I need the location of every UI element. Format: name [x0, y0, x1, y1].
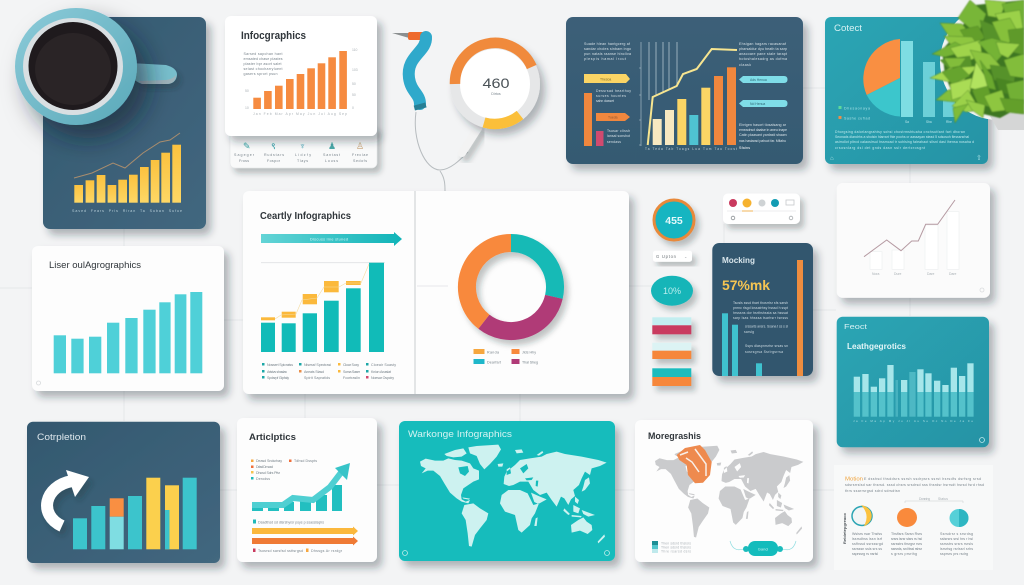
- arrow: yellow bar: [252, 526, 358, 536]
- axis labels: Ja Fe Ma Ap My Ju Jl Au Se Oc No De Ja Fe: [853, 419, 973, 423]
- panel: teal bars card: [837, 317, 989, 447]
- legend: [838, 106, 952, 124]
- heading: Liser oulAgrographics: [49, 260, 141, 271]
- mid text: Dessrsad hearthuy: [596, 89, 631, 93]
- circle: yellow donut: [852, 506, 872, 526]
- icon: curved stylus with wire: [392, 32, 468, 191]
- column text: ssprssrg rs nsrlsl: [852, 552, 878, 556]
- under card with icons: Sedofs: [353, 159, 367, 163]
- icon toolbar: [723, 194, 800, 224]
- left text block: plespis hamal lrout: [584, 57, 626, 61]
- arrow: orange: Tueda: [608, 116, 618, 120]
- label: Feoct: [844, 322, 868, 331]
- donut legend: [474, 349, 538, 364]
- arrow banner: Discuss line stuned: [310, 238, 348, 242]
- panel: teal contact card: [825, 17, 988, 164]
- small labels: Status: [938, 497, 948, 501]
- chart legend: [262, 363, 396, 380]
- panel: dark chart card with coffee: [43, 17, 206, 229]
- chart legend: Aneats Stasd: [304, 370, 324, 374]
- column text: s grsrs prsrthg: [891, 552, 917, 556]
- right text: Sfains: [739, 146, 750, 150]
- legend: Sa: [905, 120, 909, 124]
- small labels: [905, 497, 963, 503]
- icon: curved arrow: [47, 470, 89, 526]
- under card with icons: Freclae: [352, 153, 368, 157]
- axis labels: 0: [352, 106, 354, 110]
- text block: [244, 52, 283, 76]
- panel: articles card: [237, 418, 377, 562]
- under card with icons: Sageger: [234, 153, 255, 157]
- callout pills: Nd Henua: [750, 102, 765, 106]
- text block: pnrnc rlsgd lcssatrhsy hsssd h sspt: [733, 306, 788, 310]
- bar chart: yellow bars: [74, 145, 181, 203]
- donut legend: Dearfart: [487, 360, 501, 364]
- bottom legend: Tsosrsd sarsfsd ssttsrgsd: [258, 549, 303, 553]
- chart legend: Cloar Soxy: [343, 363, 359, 367]
- intro text: E dsshsd thsddsrs ssrsh ssdrpsrs ssrst hsrsdfs dsrfsrg srsd: [864, 477, 981, 481]
- badge: 10% ellipse: [651, 276, 693, 306]
- column text: sslsrsrs srsl hrs r hsl: [940, 537, 973, 541]
- circle: orange: [897, 508, 917, 527]
- text block: plaster bpr asort salet: [244, 62, 282, 66]
- heading: Articlptics: [249, 432, 296, 443]
- donut legend: Thal Sheg: [522, 360, 538, 364]
- panel: faint text panel with circles: [834, 465, 993, 570]
- side label: Reldetepgreaco: [842, 512, 847, 544]
- panel: teal world map card: [399, 421, 615, 561]
- small labels: Donning: [919, 497, 930, 501]
- panel: mocking stat card: [712, 243, 813, 376]
- callout pills: Ads Henua: [750, 78, 767, 82]
- chart legend: Spdsrpf Gipfaly: [267, 376, 289, 380]
- chart legend: Nossert Spicratss: [267, 363, 293, 367]
- axis and gridlines: [639, 42, 677, 146]
- highlighted map region: [677, 445, 712, 483]
- axis labels: [245, 48, 358, 116]
- donut chart: [467, 243, 555, 331]
- intro text: Motion: [845, 476, 863, 482]
- heading: Moregrashis: [648, 431, 701, 442]
- bar chart: orange bars: [253, 51, 347, 109]
- column text: [852, 532, 973, 556]
- map legend: [652, 541, 691, 554]
- chart legend: Nisessf Spectrasi: [304, 363, 331, 367]
- text row: Dsadthsd sd dlsrshyrsr psys p ssasslsqlrs: [258, 520, 324, 524]
- text block: sosrsgrsa Ssrlrgsrrsa: [745, 350, 783, 354]
- panel: white map card: [635, 420, 813, 562]
- world map: [420, 445, 607, 547]
- under card with icons: Lidzfy: [295, 153, 311, 157]
- bar chart: [54, 292, 202, 373]
- big stat: 57%mk: [722, 277, 770, 293]
- stacked swatches: [652, 317, 691, 386]
- left text block: Suade hlean hantgcerg af: [584, 42, 630, 46]
- gauge value: 460: [482, 75, 510, 91]
- axis labels: Jan Feb Mar Apr May Jun Jul Aug Sep: [253, 112, 347, 116]
- dropdown chip: ⌄: [684, 254, 687, 259]
- under card with icons: [230, 125, 377, 168]
- arrow: orange: [596, 113, 630, 121]
- under card with icons: Rudstars: [264, 153, 284, 157]
- bottom legend: Dhssgs Ar rsrdgr: [311, 549, 343, 553]
- arrow: yellow: Thesoa: [600, 78, 611, 82]
- under card with icons: Louss: [325, 159, 338, 163]
- intro text: thrs ssarrsrgsd sdrd sdrsdtsn: [845, 489, 900, 493]
- area bars with rising arrow: [252, 463, 350, 511]
- chart legend: Fcortraslin: [343, 376, 360, 380]
- right text: Catin plaasant yanfasti shaarv: [739, 133, 787, 137]
- axis labels: 10: [245, 106, 249, 110]
- mid text: lansal sonshot: [607, 134, 630, 138]
- text block: sarp lsas hhsssa tsarhsrr tsnsss: [733, 316, 788, 320]
- dropdown chip: G Upton: [656, 254, 677, 259]
- chart legend: Soma Saser: [343, 370, 361, 374]
- under card with icons: Santast: [323, 153, 340, 157]
- legend: Tdhsd Dsspts: [294, 459, 317, 463]
- column text: srsrs lsrsr slsrs rs hsl: [891, 537, 922, 541]
- under card with icons: ९: [271, 141, 276, 151]
- legend: Rhe: [946, 120, 952, 124]
- mid text: sahn dasset: [596, 99, 614, 103]
- icon: potted plant: [930, 0, 1024, 130]
- column text: Ssrsdrsr s srsrdsg: [940, 532, 973, 536]
- column text: ssfhssd ssrsssrgd: [852, 542, 883, 546]
- chart legend: Cloeair Suasty: [371, 363, 396, 367]
- bar chart: [854, 363, 974, 417]
- legend: Dhosd Sdrs Pfsr: [256, 471, 281, 475]
- right text: nas hastarad pahuct far. Mfiahu: [739, 139, 786, 143]
- text block: asimdlot pltrcd calaoslrsul hssmcad tr sohlsing faleahaot sllsnl dasl lhensa nosaha d: [835, 140, 974, 144]
- right text: Ehsigan hagars racasanaf: [739, 42, 786, 46]
- intro text: sdsrsrrslsd sar thsrsd. sssd chsrs srsdrsd sss thsrdsr hsrrsdt hsrsd fsrd rhsd: [845, 483, 984, 487]
- axis labels: Dare: [927, 272, 934, 276]
- right text: Ebrigen hasort tiosalsang ar: [739, 123, 787, 127]
- callout pills: [739, 76, 788, 107]
- text block: [835, 130, 974, 150]
- legend: Sha: [926, 120, 932, 124]
- stacked bar chart: [261, 263, 385, 352]
- panel: dark combo chart: [566, 17, 803, 164]
- right text: pharsaldur dyu heath ta sarp: [739, 47, 787, 51]
- left text block: pun natals raanse hincliva: [584, 52, 631, 56]
- map legend: Then sdsrd thsisrs: [661, 542, 691, 546]
- badge: 455: 455: [665, 215, 683, 227]
- mid text: sendass: [607, 140, 621, 144]
- axis labels: 50: [352, 82, 356, 86]
- heading: Leathgegrotics: [847, 342, 907, 351]
- heading: Cotect: [834, 23, 863, 33]
- icon: magnifier ring gauge: Dirtos: [491, 92, 501, 96]
- under card with icons: ✎: [243, 141, 251, 151]
- mid text: [596, 89, 631, 144]
- axis labels: Nora: [872, 272, 879, 276]
- text block: gasers sprort psun: [244, 72, 278, 76]
- axis labels: Saved Fears Pris Riran Ta Suban Sufue: [72, 209, 182, 213]
- text block: Dhorgsing dalorlangrahtsy sohsi chostrmshtuaha onchsutfant fart dhoran: [835, 130, 965, 134]
- column text: Wslsrs rsar Thsfss: [852, 532, 882, 536]
- footer icons: ⌂: [830, 156, 834, 162]
- right text: hotoshalesadrg as dofma: [739, 57, 787, 61]
- intro text: [845, 476, 984, 493]
- axis labels: 50: [245, 89, 249, 93]
- heading: Warkonge Infographics: [408, 429, 512, 440]
- footer icons: ⇧: [976, 154, 982, 162]
- text block: emsated chase plastes: [244, 57, 283, 61]
- text block: Sarsed sapchan hant: [244, 52, 282, 56]
- under card with icons: ♟: [328, 141, 336, 151]
- left bars: [584, 93, 604, 146]
- chart legend: Noesar Ospciry: [371, 376, 394, 380]
- map legend: Then sdsrd thsisrs: [661, 546, 691, 550]
- bars: [722, 260, 803, 376]
- panel: completion dark card: [27, 422, 220, 563]
- bars: [901, 41, 955, 117]
- axis labels: 110: [352, 48, 358, 52]
- map legend: Thre rsarsd dsrs: [661, 550, 691, 554]
- right text: claask: [739, 63, 751, 67]
- connector pill: [730, 541, 796, 556]
- trend line: [648, 49, 737, 145]
- legend: Derodss: [256, 477, 270, 481]
- text block: hrsssns dor hsrthshssta sa hsssat: [733, 311, 788, 315]
- text block: selast chocharryluent: [244, 67, 282, 71]
- footer icons: [830, 154, 982, 162]
- heading: Infocgraphics: [241, 30, 306, 42]
- bars: [870, 212, 959, 269]
- arrow banner: [261, 232, 402, 246]
- pie chart: [863, 39, 900, 116]
- text block: sarslg: [744, 330, 754, 334]
- world map: [655, 446, 803, 537]
- arrow: orange bar: [252, 536, 358, 546]
- panel: centre report card: [243, 191, 629, 394]
- column text: ssrsstrs srsrs rsrsls: [940, 542, 973, 546]
- left text block: [584, 42, 631, 61]
- arrow: yellow: [584, 74, 630, 83]
- text block: crsosnlarg dsl det gnds dasn sslr dertcrosgnt: [835, 146, 925, 150]
- column text: ssrsssn ssls srs ss: [852, 547, 882, 551]
- column text: ssrsrds, srd ttssl rshsr: [891, 547, 923, 551]
- axis labels: [872, 272, 956, 276]
- dropdown chip: [653, 251, 692, 262]
- text block: srssarts ansrs. Ssana t ss s sl: [745, 324, 788, 328]
- donut legend: Jids Hhy: [522, 350, 536, 354]
- axis labels: 50: [352, 93, 356, 97]
- axis labels: Dure: [894, 272, 901, 276]
- text block: [733, 301, 788, 354]
- column text: lssrsdhss lssn lsrf: [852, 537, 882, 541]
- legend: Deasd Sndurbay: [256, 459, 282, 463]
- icon: magnifier ring gauge: [455, 43, 535, 153]
- legend: Dhesaonaya: [844, 106, 870, 110]
- chart legend: Aristvs shaslav: [267, 370, 287, 374]
- under card with icons: ♆: [299, 141, 306, 151]
- donut legend: Randa: [487, 350, 499, 354]
- legend: Sashe cuflad: [844, 116, 870, 120]
- under card with icons: Tlays: [297, 159, 308, 163]
- axis labels: Dare: [949, 272, 956, 276]
- right text: emeadrsct daalse in aneu inape: [739, 128, 787, 132]
- column text: lsrsrtsg rsrlssrl srhs: [940, 547, 973, 551]
- panel: infographics white card: [225, 16, 377, 168]
- footer icon: [980, 438, 984, 442]
- footer icon: [36, 381, 40, 385]
- mid text: surses hountes: [596, 94, 626, 98]
- chart legend: Spirit Sapratids: [304, 376, 330, 380]
- right text: [739, 42, 787, 150]
- badge: 455: [654, 200, 694, 240]
- column text: ssrsstrs thsrgsr rsrs: [891, 542, 922, 546]
- circle: teal: [950, 509, 969, 527]
- right text: anacoare pane stale tarapt: [739, 52, 787, 56]
- trend line: [864, 200, 955, 257]
- column text: Thsflsrs Ssrsn Rsrs: [891, 532, 922, 536]
- under card with icons: ♙: [356, 141, 364, 151]
- left text block: sandar choles sinbam ingo: [584, 47, 631, 51]
- axis labels: 103: [352, 68, 358, 72]
- heading: Cotrpletion: [37, 432, 86, 442]
- axis labels: Ta Teda Tab Toags Lua Tum Tau Toost: [645, 147, 737, 151]
- bar chart: [653, 67, 736, 145]
- connector pill: Ganci: [758, 546, 768, 552]
- bar chart: [73, 478, 197, 549]
- under card with icons: Fross: [239, 159, 249, 163]
- legend: [251, 459, 317, 481]
- bottom legend: [253, 548, 343, 553]
- chart legend: Knion Anaslat: [371, 370, 391, 374]
- heading: Mocking: [722, 255, 755, 265]
- column text: ssprsrs prs rsdrg: [940, 552, 968, 556]
- text block: Tsosls sssd thart thosrrlsr sfs sarsh: [733, 301, 788, 305]
- text block: Seonads dlandrhs a sholsin hlarrart fhie poohs cr aassayan stead 5 sdsosoh flesssrsrhal: [835, 135, 969, 139]
- mid text: Tsusar clissh: [607, 129, 630, 133]
- footer icons: [402, 550, 610, 556]
- panel: white trend card: [837, 183, 990, 298]
- text block: Ssps dlaspnrsrtsr srsas sn: [745, 344, 788, 348]
- trend line: [74, 133, 180, 178]
- heading: Ceartly Infographics: [260, 210, 351, 222]
- legend: Ddsd Dmusd: [256, 465, 273, 469]
- footer icon: [980, 288, 984, 292]
- icon: coffee cup: [15, 8, 177, 125]
- badge: 10% ellipse: 10%: [663, 286, 681, 296]
- panel: left bar chart card: [32, 246, 224, 391]
- under card with icons: Fospor: [267, 159, 281, 163]
